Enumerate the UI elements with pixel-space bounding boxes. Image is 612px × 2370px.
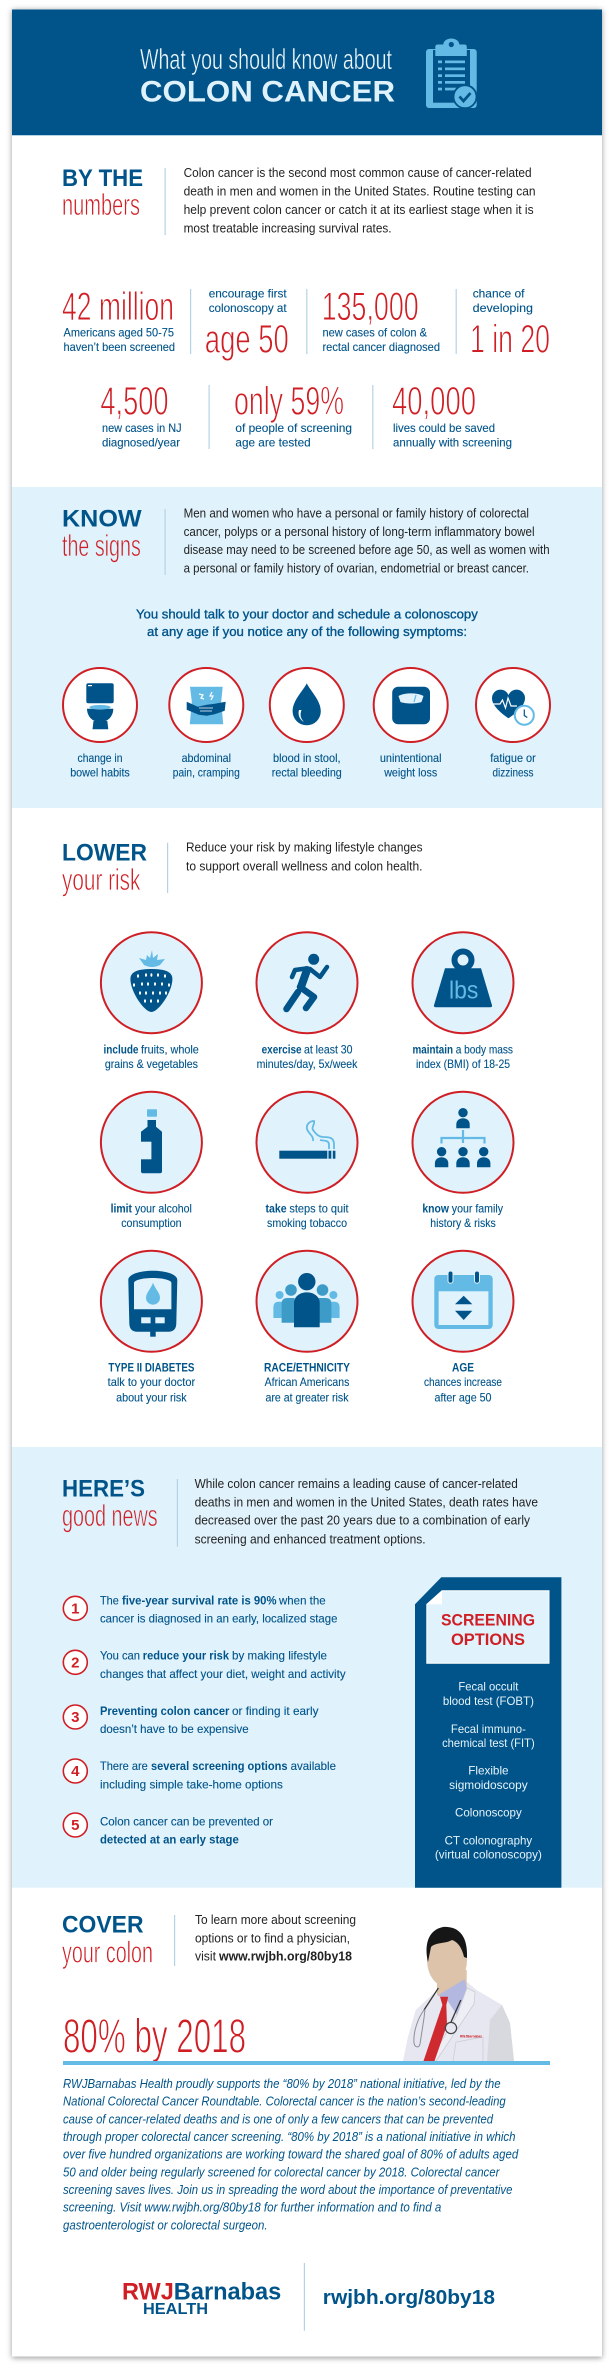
heading: cover your colon [62, 1912, 153, 1970]
list item 2 [63, 1649, 346, 1681]
list of screening options: CT colonography [445, 1834, 532, 1848]
stat: 42 million [62, 285, 175, 354]
footer logo: RWJ [122, 2278, 174, 2305]
heading: by the numbers: numbers [62, 187, 140, 222]
intro paragraph: Colon cancer is the second most common cause of cancer-related [184, 165, 532, 180]
paragraph: who is at risk [184, 506, 550, 575]
paragraph: death rates decreased [195, 1476, 538, 1546]
heading: here's good news: good news [62, 1498, 158, 1533]
footer logo: Barnabas [174, 2278, 281, 2305]
risk item: age: after age 50 [434, 1390, 492, 1404]
stat: 4,500 [100, 379, 182, 450]
list item 2: by making lifestyle [232, 1649, 327, 1663]
panel: know the signs [12, 487, 602, 808]
risk item: alcohol: consumption [121, 1216, 182, 1230]
paragraph: who is at risk: disease may need to be screened before age 50, as well as women with [184, 542, 550, 557]
heading: know the signs: the signs [62, 528, 141, 563]
risk item: tobacco: take [266, 1201, 287, 1215]
stat: 135,000: new cases of colon & [322, 326, 427, 340]
list of screening options: Fecal occult [458, 1680, 519, 1694]
list of screening options: sigmoidoscopy [449, 1778, 528, 1792]
symptom: fatigue or dizziness: dizziness [492, 766, 534, 780]
icon: weight: lbs [449, 976, 478, 1004]
icon: family tree [435, 1108, 490, 1167]
heading: cover your colon: COVER [62, 1912, 144, 1939]
list of screening options: blood test (FOBT) [443, 1694, 534, 1708]
intro paragraph: help prevent colon cancer or catch it at its earliest stage when it is [184, 202, 534, 217]
risk item: age [412, 1251, 514, 1404]
risk item: tobacco [256, 1092, 358, 1230]
stat: 42 million: 42 million [62, 285, 174, 329]
list of screening options: chemical test (FIT) [442, 1736, 535, 1750]
icon: blood drop [293, 683, 321, 725]
list item 5: Colon cancer can be prevented or [100, 1814, 273, 1828]
stat: 40,000: lives could be saved [393, 421, 495, 435]
list item 1: The [100, 1593, 119, 1607]
symptom: unintentional weight loss: unintentional [380, 751, 442, 765]
risk item: alcohol: limit [111, 1201, 132, 1215]
risk item: fruits: grains & vegetables [105, 1057, 198, 1071]
footer logo: HEALTH [143, 2301, 208, 2318]
heading: screening options [441, 1611, 535, 1649]
paragraph: death rates decreased: While colon cancer remains a leading cause of cancer-related [195, 1476, 518, 1491]
list item 3: or finding it early [232, 1704, 318, 1718]
doctor illustration [403, 1927, 514, 2061]
risk item: age: chances increase [424, 1375, 502, 1389]
panel: here's good news [12, 1447, 602, 1888]
risk item: family history [412, 1092, 514, 1230]
paragraph: national initiative: through proper colorectal cancer screening. “80% by 2018” is a national initiative in which [63, 2130, 516, 2144]
risk item: exercise: exercise [262, 1042, 302, 1056]
heading: screening options: OPTIONS [451, 1630, 525, 1649]
stat: age 50: age 50 [205, 318, 289, 362]
text: find a physician [195, 1912, 356, 1964]
stat: 42 million: Americans aged 50-75 [64, 326, 174, 340]
paragraph: national initiative [63, 2077, 519, 2232]
stat: age 50: encourage first [209, 287, 287, 301]
risk item: body mass index [412, 932, 514, 1071]
stat: 135,000 [322, 285, 440, 354]
heading: know the signs [62, 506, 142, 563]
risk item: fruits: fruits, whole [141, 1042, 199, 1056]
heading: know the signs: KNOW [62, 506, 142, 533]
intro paragraph: most treatable increasing survival rates. [184, 221, 392, 236]
symptom: abdominal pain [169, 668, 243, 780]
risk item: alcohol: your alcohol [135, 1201, 192, 1215]
paragraph: national initiative: RWJBarnabas Health proudly supports the “80% by 2018” national initiative, led by the [63, 2077, 501, 2091]
stat: 42 million: haven’t been screened [64, 340, 175, 354]
callout: talk to your doctor: You should talk to your doctor and schedule a colonoscopy [136, 607, 478, 622]
heading: by the numbers [62, 165, 143, 222]
paragraph: death rates decreased: screening and enhanced treatment options. [195, 1531, 426, 1546]
stat: 40,000: 40,000 [392, 379, 476, 423]
stat: 1 in 20: developing [473, 301, 533, 315]
risk item: tobacco: smoking tobacco [267, 1216, 347, 1230]
footer url: rwjbh.org/80by18 [323, 2287, 495, 2309]
list item 3: doesn’t have to be expensive [100, 1722, 249, 1736]
list item 1: five-year survival rate is 90% [122, 1593, 277, 1607]
stat: 40,000 [392, 379, 512, 450]
list item 1: 1 [71, 1600, 79, 1618]
icon: cigarette [279, 1121, 335, 1159]
list of screening options: Fecal immuno- [451, 1722, 526, 1736]
paragraph: death rates decreased: decreased over the past 20 years due to a combination of early [195, 1513, 530, 1528]
icon: toilet [86, 683, 114, 729]
symptom: blood in stool: blood in stool, [273, 751, 341, 765]
risk item: body mass index: a body mass [456, 1042, 513, 1056]
icon: glucose meter [128, 1271, 177, 1337]
list item 5: detected at an early stage [100, 1833, 239, 1847]
symptom: unintentional weight loss [374, 668, 448, 780]
risk item: race and ethnicity: are at greater risk [266, 1390, 349, 1404]
intro paragraph [184, 165, 536, 236]
risk item: race and ethnicity: RACE/ETHNICITY [264, 1360, 350, 1374]
list item 4: 4 [71, 1763, 80, 1780]
list item 1: when the [278, 1593, 326, 1607]
symptom: fatigue or dizziness [476, 668, 550, 780]
paragraph: who is at risk: cancer, polyps or a personal history of long-term inflammatory bowel [184, 524, 535, 539]
risk item: body mass index: maintain [412, 1042, 453, 1056]
doctor illustration: RWJBarnabas [460, 2034, 482, 2038]
icon: bathroom scale [392, 687, 430, 724]
risk item: tobacco: steps to quit [289, 1201, 349, 1215]
heading: lower your risk: your risk [62, 862, 141, 897]
stat: 4,500: diagnosed/year [102, 436, 180, 450]
risk item: exercise [256, 932, 358, 1071]
heading: cover your colon: your colon [62, 1935, 153, 1970]
paragraph: national initiative: cause of cancer-related deaths and is one of only a few cancers that can be prevented [63, 2112, 494, 2126]
risk item: fruits: include [104, 1042, 139, 1056]
list item 5: 5 [71, 1817, 79, 1834]
list item 2: 2 [71, 1654, 79, 1672]
list item 5 [63, 1813, 273, 1847]
callout: talk to your doctor [136, 607, 478, 639]
symptom: blood in stool [270, 668, 344, 780]
paragraph: national initiative: gastroenterologist or colorectal surgeon. [63, 2218, 268, 2232]
risk item: race and ethnicity: African Americans [265, 1375, 349, 1389]
symptom: fatigue or dizziness: fatigue or [490, 751, 536, 765]
list item 4: available [291, 1759, 336, 1773]
stat: 4,500: new cases in NJ [102, 421, 182, 435]
heading: screening options: SCREENING [441, 1611, 535, 1630]
risk item: type II diabetes: talk to your doctor [108, 1375, 195, 1389]
paragraph: national initiative: National Colorectal Cancer Roundtable. Colorectal cancer is the nation’s second-leading [63, 2095, 506, 2109]
header banner [12, 10, 602, 136]
list of screening options: Flexible [468, 1764, 509, 1778]
paragraph: reduce your risk: Reduce your risk by making lifestyle changes [186, 840, 423, 855]
risk item: exercise: at least 30 [304, 1042, 353, 1056]
title: What you should know about [140, 44, 392, 76]
callout: talk to your doctor: at any age if you notice any of the following symptoms: [147, 624, 467, 639]
paragraph: reduce your risk: to support overall wellness and colon health. [186, 858, 422, 873]
list item 4: several screening options [151, 1759, 288, 1773]
icon: abdomen with hands [187, 687, 226, 724]
panel: by the numbers [62, 165, 550, 450]
stat: only 59%: of people of screening [235, 421, 352, 435]
footer logo [122, 2278, 281, 2318]
paragraph: national initiative: over five hundred organizations are working toward the shared goal of 80% of adults aged [63, 2148, 519, 2162]
risk item: exercise: minutes/day, 5x/week [257, 1057, 358, 1071]
list item 4: There are [100, 1759, 148, 1773]
risk item: family history: history & risks [430, 1216, 496, 1230]
risk item: race and ethnicity [256, 1251, 358, 1404]
heading: by the numbers: BY THE [62, 165, 143, 192]
text: find a physician: visit [195, 1949, 216, 1964]
risk item: type II diabetes: about your risk [116, 1390, 188, 1404]
list item 3: Preventing colon cancer [100, 1704, 230, 1718]
text: find a physician: www.rwjbh.org/80by18 [218, 1949, 352, 1964]
intro paragraph: death in men and women in the United States. Routine testing can [184, 184, 536, 198]
paragraph: who is at risk: a personal or family history of ovarian, endometrial or breast cancer. [184, 560, 529, 575]
stat: only 59%: age are tested [235, 436, 311, 450]
symptom: change in bowel habits: bowel habits [70, 766, 130, 780]
risk item: type II diabetes: TYPE II DIABETES [108, 1360, 194, 1374]
stat: only 59%: only 59% [234, 379, 344, 423]
paragraph: reduce your risk [186, 840, 423, 873]
symptom: change in bowel habits: change in [78, 751, 122, 765]
panel: screening options [415, 1577, 561, 1888]
heading: here's good news [62, 1476, 158, 1533]
icon: group of people [273, 1273, 340, 1327]
panel: cover your colon [62, 1912, 550, 2331]
title: COLON CANCER [140, 76, 395, 109]
symptom: change in bowel habits [63, 668, 137, 780]
stat: 1 in 20: 1 in 20 [470, 318, 550, 362]
risk item: fruits [101, 932, 202, 1071]
paragraph: national initiative: 50 and older being regularly screened for colorectal cancer by 2018. Colorectal cancer [63, 2165, 500, 2179]
icon: strawberry [130, 950, 172, 1012]
list item 2: changes that affect your diet, weight and activity [100, 1667, 346, 1681]
paragraph: who is at risk: Men and women who have a personal or family history of colorectal [184, 506, 529, 521]
symptom: unintentional weight loss: weight loss [383, 766, 437, 780]
text: find a physician: To learn more about screening [195, 1912, 356, 1927]
stat: 4,500: 4,500 [100, 379, 169, 423]
risk item: age: AGE [452, 1360, 474, 1374]
list item 4: including simple take-home options [100, 1777, 283, 1791]
panel: lower your risk [62, 840, 514, 1404]
icon: runner [286, 954, 327, 1009]
symptom: blood in stool: rectal bleeding [272, 766, 342, 780]
heading: 80% by 2018: 80% by 2018 [63, 2011, 246, 2064]
list item 3 [63, 1704, 318, 1736]
icon: clipboard with check [426, 38, 477, 108]
icon: bottle [140, 1109, 162, 1173]
list item 1 [63, 1593, 338, 1626]
stat: only 59% [234, 379, 352, 450]
icon: heart with stopwatch [492, 690, 534, 725]
paragraph: death rates decreased: deaths in men and women in the United States, death rates have [195, 1494, 538, 1509]
symptom: abdominal pain: pain, cramping [173, 766, 240, 780]
stat: 135,000: 135,000 [322, 285, 419, 329]
paragraph: national initiative: screening. Visit www.rwjbh.org/80by18 for further information and to find a [63, 2201, 441, 2215]
heading: lower your risk: LOWER [62, 840, 147, 867]
paragraph: national initiative: screening saves lives. Join us in spreading the word about the importance of preventative [63, 2183, 512, 2197]
list item 3: 3 [71, 1709, 79, 1726]
risk item: family history: your family [452, 1201, 503, 1215]
risk item: type II diabetes [101, 1251, 202, 1404]
stat: age 50: colonoscopy at [209, 301, 287, 315]
icon: calendar [434, 1271, 493, 1329]
stat: age 50 [205, 287, 289, 362]
text: find a physician: options or to find a physician, [195, 1931, 350, 1946]
list item 1: cancer is diagnosed in an early, localized stage [100, 1612, 338, 1626]
heading: here's good news: HERE’S [62, 1476, 145, 1503]
list of screening options [435, 1680, 542, 1862]
stat: 1 in 20 [470, 287, 550, 362]
list item 2: reduce your risk [143, 1649, 229, 1663]
symptom: abdominal pain: abdominal [182, 751, 231, 765]
list item 4 [63, 1759, 336, 1791]
list of screening options: (virtual colonoscopy) [435, 1848, 542, 1862]
stat: 135,000: rectal cancer diagnosed [322, 340, 440, 354]
list item 2: You can [100, 1649, 140, 1663]
heading: lower your risk [62, 840, 147, 897]
title [140, 44, 395, 109]
risk item: alcohol [101, 1092, 202, 1230]
stat: 1 in 20: chance of [473, 287, 525, 301]
list of screening options: Colonoscopy [455, 1805, 522, 1819]
risk item: body mass index: index (BMI) of 18-25 [416, 1057, 510, 1071]
stat: 40,000: annually with screening [393, 436, 512, 450]
risk item: family history: know [422, 1201, 450, 1215]
